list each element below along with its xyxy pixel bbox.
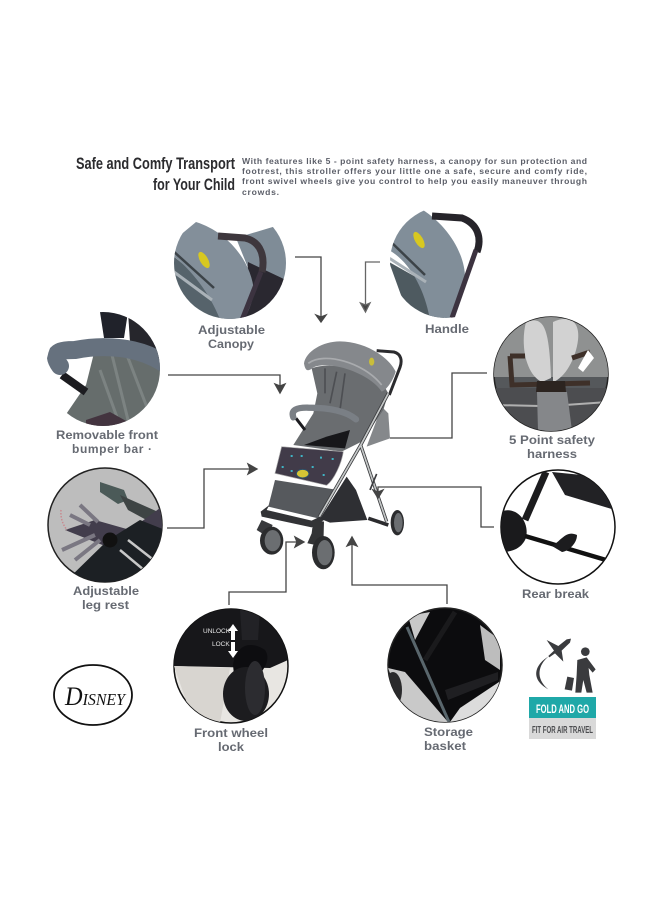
label: lock: LOCK <box>212 641 230 648</box>
label: rear break: Rear break <box>522 587 589 601</box>
photo: front wheel lock <box>174 609 288 723</box>
seat bottom <box>268 480 334 519</box>
description text: front swivel wheels give you control to help you easily maneuver through <box>242 176 587 186</box>
bumper bar <box>293 408 356 419</box>
basket <box>320 477 367 523</box>
label: adjustable leg rest: Adjustable <box>73 584 139 598</box>
label: removable front bumper bar <box>56 428 158 456</box>
seat back <box>293 366 388 452</box>
icon: lock arrow <box>228 642 238 658</box>
badge: fold and go: FOLD AND GO <box>536 704 589 716</box>
frame <box>319 393 388 522</box>
label: front wheel lock: lock <box>218 740 244 754</box>
description text: crowds. <box>242 187 279 197</box>
bumper arm <box>296 418 305 430</box>
arrow: canopy <box>295 257 326 322</box>
label: storage basket: basket <box>424 739 466 753</box>
label: front wheel lock: Front wheel <box>194 726 268 740</box>
label: removable front bumper bar: bumper bar · <box>72 442 152 456</box>
photo: handle <box>389 207 479 320</box>
arrow: leg rest <box>167 464 257 528</box>
footrest cover <box>275 447 343 485</box>
harness <box>304 430 350 448</box>
title <box>76 154 235 194</box>
canopy <box>304 341 396 392</box>
photo: stroller <box>257 341 404 569</box>
photo: front bumper bar <box>46 312 162 426</box>
icon: unlock arrow <box>228 624 238 640</box>
flight path <box>536 657 548 689</box>
footrest tray <box>261 505 324 527</box>
label: 5 point safety harness <box>509 433 595 461</box>
arrow: bumper bar <box>168 375 285 393</box>
arrow: front wheel lock <box>229 537 304 605</box>
handle bar <box>377 351 401 395</box>
arrow: storage basket <box>347 537 447 604</box>
photo: adjustable leg rest <box>48 468 165 585</box>
arrow: handle <box>360 262 380 312</box>
label: handle: Handle <box>425 322 469 336</box>
title: for Your Child <box>153 175 235 194</box>
rear pocket <box>367 407 390 447</box>
description text <box>242 156 587 197</box>
label: adjustable canopy: Adjustable <box>198 323 265 337</box>
plane <box>547 639 571 662</box>
title: Safe and Comfy Transport <box>76 154 235 173</box>
logo: disney: DISNEY <box>64 682 126 711</box>
photo: 5 point safety harness <box>494 317 608 431</box>
badge: fold and go: FIT FOR AIR TRAVEL <box>532 725 593 736</box>
label: removable front bumper bar: Removable front <box>56 428 158 442</box>
photo: storage basket <box>384 608 502 722</box>
label: adjustable leg rest: leg rest <box>82 598 129 612</box>
arrow: rear brake <box>373 487 494 527</box>
label: adjustable canopy: Canopy <box>208 337 254 351</box>
label: front wheel lock <box>194 726 268 754</box>
brake lever <box>370 474 377 490</box>
description text: With features like 5 - point safety harness, a canopy for sun protection and <box>242 156 587 166</box>
label: storage basket: Storage <box>424 725 473 739</box>
logo: disney <box>54 665 132 725</box>
photo: rear brake <box>500 470 615 584</box>
wheels and forks <box>257 520 273 537</box>
label: 5 point safety harness: 5 Point safety <box>509 433 595 447</box>
label: adjustable leg rest <box>73 584 139 612</box>
badge: fold and go <box>529 697 596 739</box>
traveller <box>565 647 596 693</box>
arrow: harness <box>390 373 487 438</box>
label: 5 point safety harness: harness <box>527 447 577 461</box>
icon: plane and traveller <box>536 639 596 693</box>
label: storage basket <box>424 725 473 753</box>
description text: footrest, this stroller offers your little one a safe, secure and comfy ride, <box>242 166 587 176</box>
label: adjustable canopy <box>198 323 265 351</box>
label: unlock: UNLOCK <box>203 628 231 635</box>
photo: adjustable canopy <box>174 222 286 319</box>
